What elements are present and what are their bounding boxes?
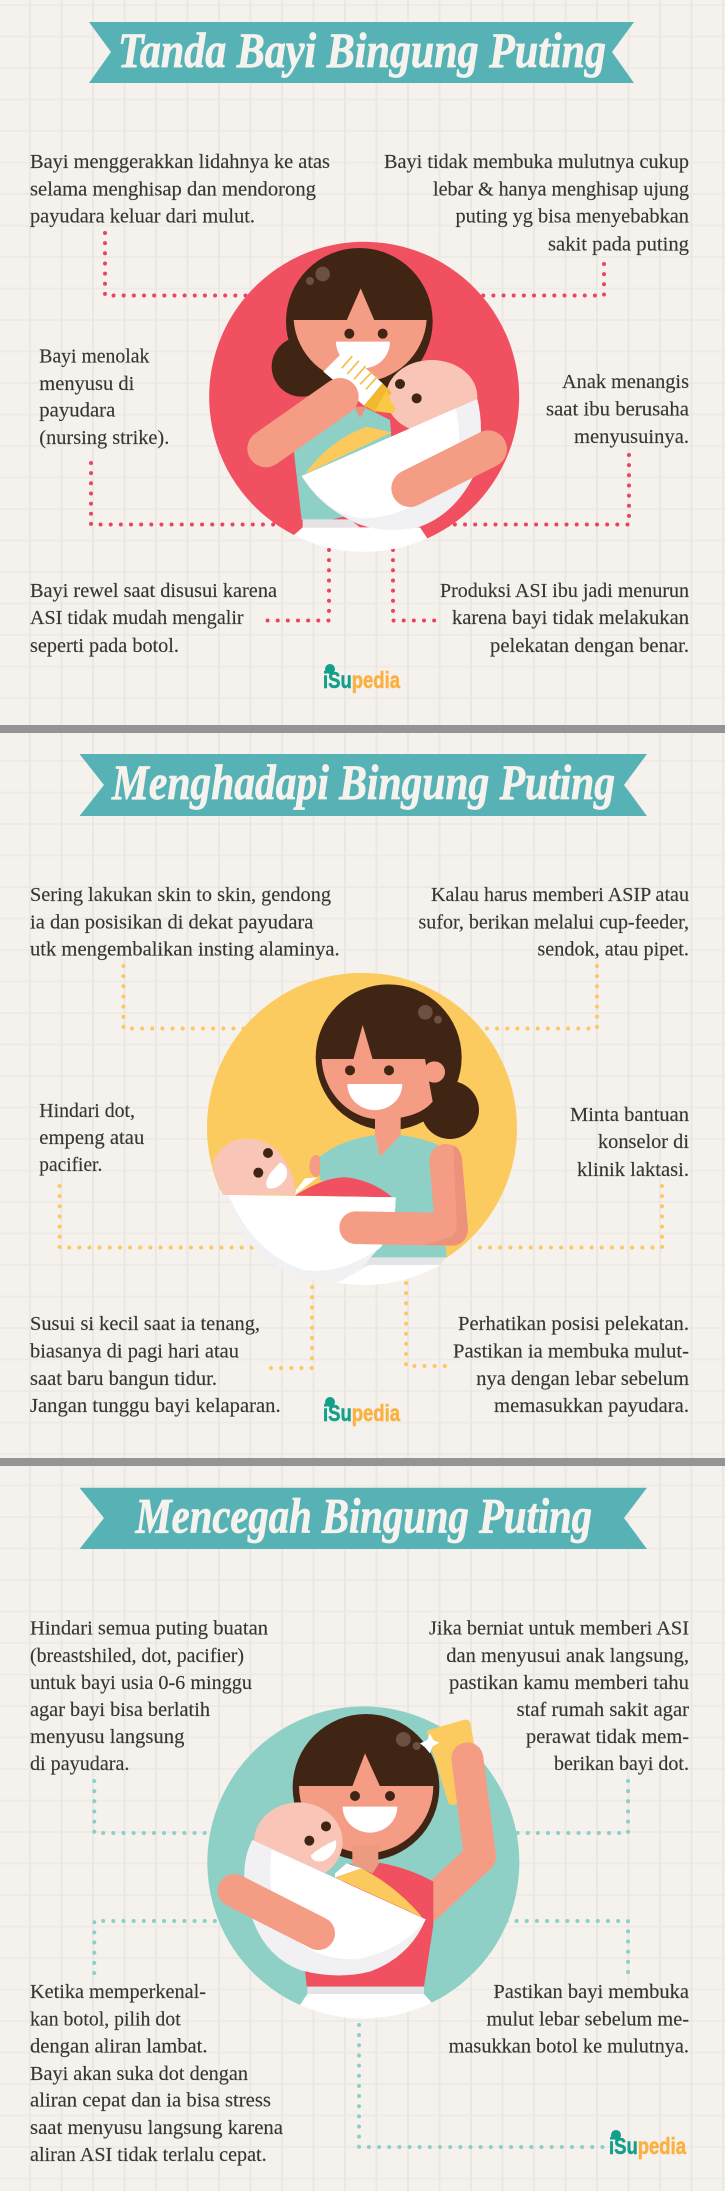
- baby garment: [305, 427, 392, 474]
- text: introducing a bottle: Ketika memperkenal-: [30, 1981, 206, 2003]
- text: introducing a bottle: saat menyusu langsung karena: [30, 2117, 283, 2139]
- hair and bun: [272, 248, 433, 397]
- text: milk supply drops: [440, 580, 689, 657]
- text: baby cries: Anak menangis: [562, 371, 689, 393]
- text: nursing strike: [39, 346, 169, 449]
- shirt: [320, 1135, 447, 1258]
- text: mouth not open: lebar & hanya menghisap ujung: [433, 178, 689, 200]
- blanket highlight: [223, 1195, 396, 1271]
- illustration: smiling mother holding baby on yellow circle: [207, 973, 517, 1285]
- text: cup feeder: sufor, berikan melalui cup-feeder,: [418, 911, 689, 933]
- face: [322, 1059, 433, 1119]
- hair highlights: [306, 267, 330, 285]
- connector lines: [60, 966, 662, 1368]
- text: tongue movement: selama menghisap dan mendorong: [30, 178, 316, 200]
- text: introducing a bottle: Bayi akan suka dot dengan: [30, 2063, 248, 2085]
- face: [294, 320, 427, 382]
- text: fussy baby: ASI tidak mudah mengalir: [30, 607, 244, 629]
- neck: [375, 1115, 401, 1157]
- face: [299, 1786, 433, 1853]
- text: introducing a bottle: aliran ASI tidak terlalu cepat.: [30, 2144, 267, 2166]
- connector lines: [91, 233, 629, 620]
- text: feed when calm: Susui si kecil saat ia tenang,: [30, 1313, 260, 1335]
- bottle: [427, 1720, 483, 1805]
- logo: iSupedia: iSupedia: [323, 667, 400, 693]
- text: feed when calm: saat baru bangun tidur.: [30, 1368, 217, 1390]
- mouth: [343, 1807, 397, 1833]
- heading ribbon: Tanda Bayi Bingung Puting: Tanda Bayi Bingung Puting: [118, 22, 606, 78]
- blanket: [244, 1840, 426, 1975]
- logo: iSupedia: iSupedia: [609, 2133, 686, 2159]
- text: avoid pacifier: Hindari dot,: [39, 1100, 135, 1122]
- text: introducing a bottle: aliran cepat dan ia bisa stress: [30, 2090, 271, 2112]
- text: tell hospital staff: [429, 1618, 689, 1775]
- text: tongue movement: [30, 151, 330, 228]
- text: tongue movement: payudara keluar dari mulut.: [30, 206, 255, 228]
- baby eyes: [253, 1148, 273, 1178]
- baby head: [386, 360, 477, 433]
- text: avoid artificial nipples: agar bayi bisa berlatih: [30, 1699, 210, 1721]
- section divider: [0, 725, 725, 733]
- baby garment: [335, 1863, 362, 1877]
- neck: [352, 1845, 378, 1873]
- text: wide open mouth: mulut lebar sebelum me-: [486, 2009, 689, 2031]
- text: tell hospital staff: dan menyusui anak langsung,: [446, 1645, 689, 1667]
- torso: [293, 406, 393, 520]
- waist band: [367, 1257, 446, 1265]
- baby head: [213, 1139, 295, 1195]
- text: latch position: nya dengan lebar sebelum: [476, 1368, 689, 1390]
- text: avoid pacifier: pacifier.: [39, 1154, 102, 1176]
- text: mouth not open: [384, 151, 689, 256]
- raised arm: [427, 1758, 480, 1907]
- mouth: [336, 342, 390, 368]
- bottle: [323, 350, 396, 413]
- text: introducing a bottle: [30, 1981, 283, 2166]
- neck: [354, 407, 367, 418]
- text: latch position: Pastikan ia membuka mulut-: [453, 1341, 689, 1363]
- illustration: mother rejecting bottle on teal circle: [207, 1706, 519, 2018]
- text: cup feeder: [418, 884, 689, 960]
- text: lactation counselor: klinik laktasi.: [577, 1159, 689, 1181]
- text: skin to skin: Sering lakukan skin to skin, gendong: [30, 884, 331, 906]
- text: latch position: Perhatikan posisi pelekatan.: [458, 1313, 689, 1335]
- panel: menghadapi bingung puting: [30, 754, 689, 1426]
- panel: tanda bayi bingung puting: [30, 22, 689, 693]
- back arm: [410, 449, 488, 488]
- hair highlights: [396, 1732, 421, 1750]
- text: tell hospital staff: staf rumah sakit agar: [517, 1699, 689, 1721]
- text: introducing a bottle: kan botol, pilih dot: [30, 2009, 181, 2031]
- hair and bun: [316, 984, 479, 1139]
- shirt bottom: [337, 1265, 440, 1285]
- blanket highlight: [270, 1849, 426, 1959]
- arm: [356, 1145, 468, 1246]
- mouth: [347, 1084, 402, 1110]
- baby eyes: [304, 1821, 331, 1846]
- text: fussy baby: [30, 580, 277, 657]
- text: nursing strike: payudara: [39, 400, 115, 422]
- text: skin to skin: [30, 884, 340, 960]
- fringe parting: [347, 288, 374, 320]
- text: milk supply drops: Produksi ASI ibu jadi menurun: [440, 580, 689, 602]
- text: avoid artificial nipples: (breastshiled, dot, pacifier): [30, 1645, 244, 1667]
- eyes: [345, 1065, 394, 1075]
- fringe parting: [352, 1753, 380, 1786]
- text: tongue movement: Bayi menggerakkan lidahnya ke atas: [30, 151, 330, 173]
- text: wide open mouth: masukkan botol ke mulutnya.: [449, 2036, 689, 2058]
- connector lines: [94, 1781, 628, 2147]
- text: avoid artificial nipples: untuk bayi usia 0-6 minggu: [30, 1672, 252, 1694]
- text: avoid artificial nipples: menyusu langsung: [30, 1726, 184, 1748]
- text: mouth not open: Bayi tidak membuka mulutnya cukup: [384, 151, 689, 173]
- eyes: [350, 1791, 395, 1801]
- red circle: [209, 242, 519, 538]
- eyes: [344, 329, 388, 339]
- illustration: mother bottle feeding baby on red circle: [209, 242, 519, 552]
- text: baby cries: [546, 371, 689, 448]
- text: fussy baby: seperti pada botol.: [30, 635, 179, 657]
- text: mouth not open: sakit pada puting: [548, 234, 689, 256]
- text: tell hospital staff: berikan bayi dot.: [554, 1753, 689, 1775]
- bottle nipple: [420, 1733, 439, 1753]
- hair: [293, 1714, 439, 1861]
- text: feed when calm: Jangan tunggu bayi kelaparan.: [30, 1395, 281, 1417]
- text: baby cries: saat ibu berusaha: [546, 399, 689, 421]
- text: avoid pacifier: empeng atau: [39, 1127, 144, 1149]
- baby eyes: [395, 379, 422, 403]
- text: baby cries: menyusuinya.: [574, 426, 689, 448]
- text: introducing a bottle: dengan aliran lambat.: [30, 2036, 208, 2058]
- waist band: [307, 1987, 424, 1994]
- section divider: [0, 1458, 725, 1466]
- text: avoid artificial nipples: di payudara.: [30, 1753, 129, 1775]
- text: mouth not open: puting yg bisa menyebabkan: [456, 206, 689, 228]
- text: skin to skin: utk mengembalikan insting alaminya.: [30, 938, 340, 960]
- text: fussy baby: Bayi rewel saat disusui karena: [30, 580, 277, 602]
- text: avoid pacifier: [39, 1100, 144, 1176]
- text: lactation counselor: Minta bantuan: [570, 1104, 689, 1126]
- text: nursing strike: Bayi menolak: [39, 346, 150, 368]
- text: nursing strike: (nursing strike).: [39, 427, 169, 449]
- text: tell hospital staff: Jika berniat untuk memberi ASI: [429, 1618, 689, 1640]
- shirt: [305, 1863, 433, 1987]
- front arm: [266, 397, 340, 449]
- text: avoid artificial nipples: [30, 1618, 268, 1775]
- yellow circle: [207, 973, 517, 1258]
- shirt bottom: [294, 527, 427, 552]
- blanket: [302, 399, 481, 530]
- text: skin to skin: ia dan posisikan di dekat payudara: [30, 911, 313, 933]
- text: feed when calm: biasanya di pagi hari atau: [30, 1341, 239, 1363]
- text: tell hospital staff: pastikan kamu memberi tahu: [449, 1672, 689, 1694]
- text: milk supply drops: pelekatan dengan benar.: [490, 635, 689, 657]
- text: milk supply drops: karena bayi tidak melakukan: [452, 607, 689, 629]
- heading ribbon: Menghadapi Bingung Puting: Menghadapi Bingung Puting: [111, 754, 615, 810]
- baby garment: [295, 1177, 392, 1197]
- text: lactation counselor: [570, 1104, 689, 1181]
- text: nursing strike: menyusu di: [39, 373, 135, 395]
- baby mouth: [311, 1840, 336, 1862]
- fringe parting: [353, 1025, 373, 1059]
- text: avoid artificial nipples: Hindari semua puting buatan: [30, 1618, 268, 1640]
- text: tell hospital staff: perawat tidak mem-: [526, 1726, 689, 1748]
- baby head: [254, 1802, 343, 1881]
- hair highlights: [418, 1005, 442, 1024]
- text: latch position: [453, 1313, 689, 1417]
- logo: iSupedia: iSupedia: [323, 1400, 400, 1426]
- front arm: [234, 1891, 318, 1933]
- blanket highlight: [302, 408, 459, 518]
- text: latch position: memasukkan payudara.: [494, 1395, 689, 1417]
- teal circle: [207, 1706, 519, 2005]
- baby mouth: [266, 1162, 287, 1189]
- heading ribbon: Mencegah Bingung Puting: Mencegah Bingung Puting: [135, 1488, 592, 1544]
- text: lactation counselor: konselor di: [598, 1131, 689, 1153]
- blanket: [223, 1195, 396, 1282]
- waist band: [303, 519, 360, 527]
- text: cup feeder: Kalau harus memberi ASIP atau: [431, 884, 689, 906]
- text: cup feeder: sendok, atau pipet.: [537, 938, 689, 960]
- ear: [424, 1061, 445, 1083]
- far hand: [309, 1155, 323, 1177]
- text: feed when calm: [30, 1313, 281, 1417]
- text: wide open mouth: Pastikan bayi membuka: [493, 1981, 689, 2003]
- text: wide open mouth: [449, 1981, 689, 2058]
- panel: mencegah bingung puting: [30, 1488, 689, 2166]
- shirt bottom: [300, 1994, 432, 2018]
